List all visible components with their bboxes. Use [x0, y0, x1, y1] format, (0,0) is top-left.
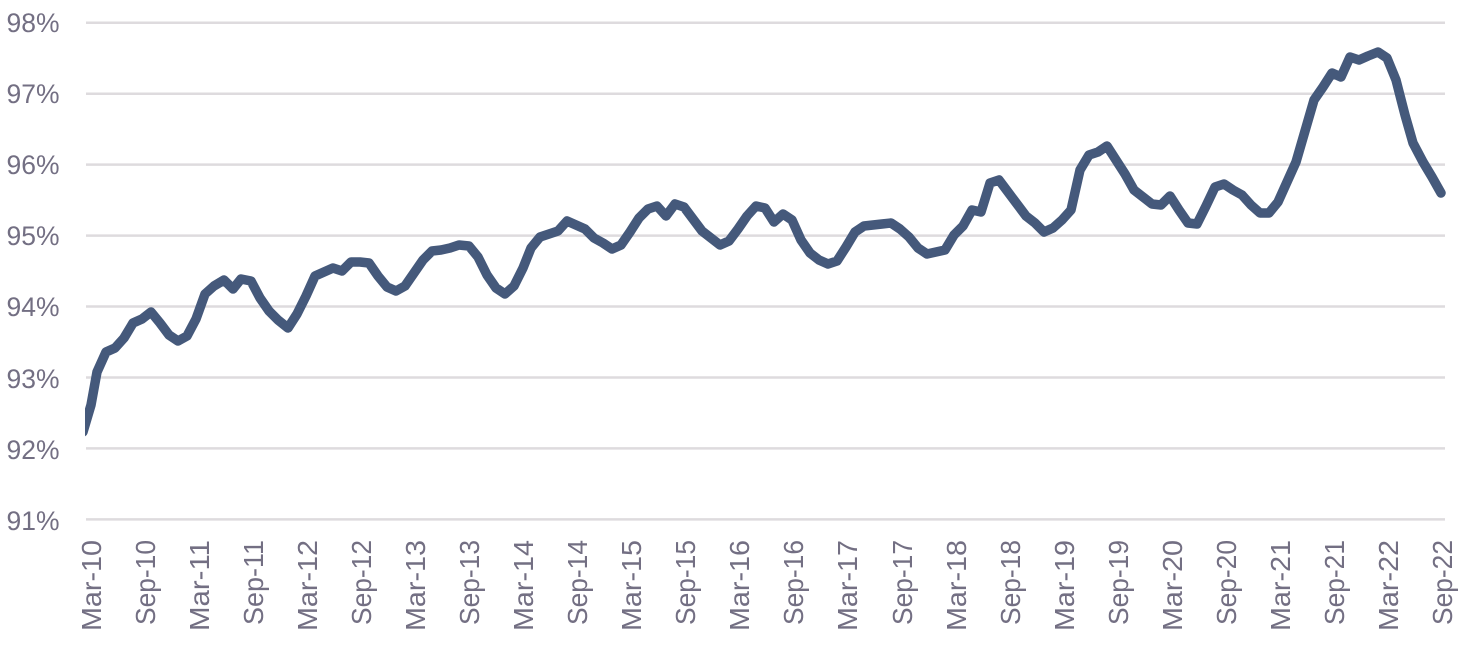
x axis labels: Sep-20 [1211, 540, 1242, 625]
y axis labels: 94% [6, 292, 60, 322]
y axis labels [6, 8, 60, 536]
x axis labels: Mar-20 [1157, 540, 1188, 631]
x axis labels: Mar-13 [400, 540, 431, 631]
x axis labels: Mar-17 [832, 540, 863, 631]
x axis labels: Sep-18 [995, 540, 1026, 625]
x axis labels: Sep-22 [1427, 540, 1458, 625]
y axis labels: 92% [6, 435, 60, 465]
x axis labels: Mar-21 [1265, 540, 1296, 631]
x axis labels: Sep-11 [238, 540, 269, 625]
y axis labels: 98% [6, 8, 60, 38]
x axis labels: Mar-16 [724, 540, 755, 631]
x axis labels: Mar-15 [616, 540, 647, 631]
x axis labels: Sep-14 [562, 540, 593, 625]
x axis labels: Sep-10 [130, 540, 161, 625]
y axis labels: 95% [6, 221, 60, 251]
x axis labels: Mar-12 [292, 540, 323, 631]
y axis labels: 93% [6, 364, 60, 394]
x axis labels: Sep-17 [887, 540, 918, 625]
y axis labels: 96% [6, 150, 60, 180]
y axis labels: 97% [6, 79, 60, 109]
x axis labels: Mar-10 [76, 540, 107, 631]
x axis labels: Sep-15 [670, 540, 701, 625]
x axis labels: Mar-22 [1373, 540, 1404, 631]
x axis labels: Sep-19 [1103, 540, 1134, 625]
x axis labels [76, 540, 1458, 631]
x axis labels: Sep-21 [1319, 540, 1350, 625]
x axis labels: Mar-11 [184, 540, 215, 631]
y axis labels: 91% [6, 506, 60, 536]
data line [83, 52, 1441, 432]
x axis labels: Mar-14 [508, 540, 539, 631]
x axis labels: Sep-12 [346, 540, 377, 625]
x axis labels: Mar-19 [1049, 540, 1080, 631]
x axis labels: Mar-18 [941, 540, 972, 631]
x axis labels: Sep-16 [778, 540, 809, 625]
x axis labels: Sep-13 [454, 540, 485, 625]
